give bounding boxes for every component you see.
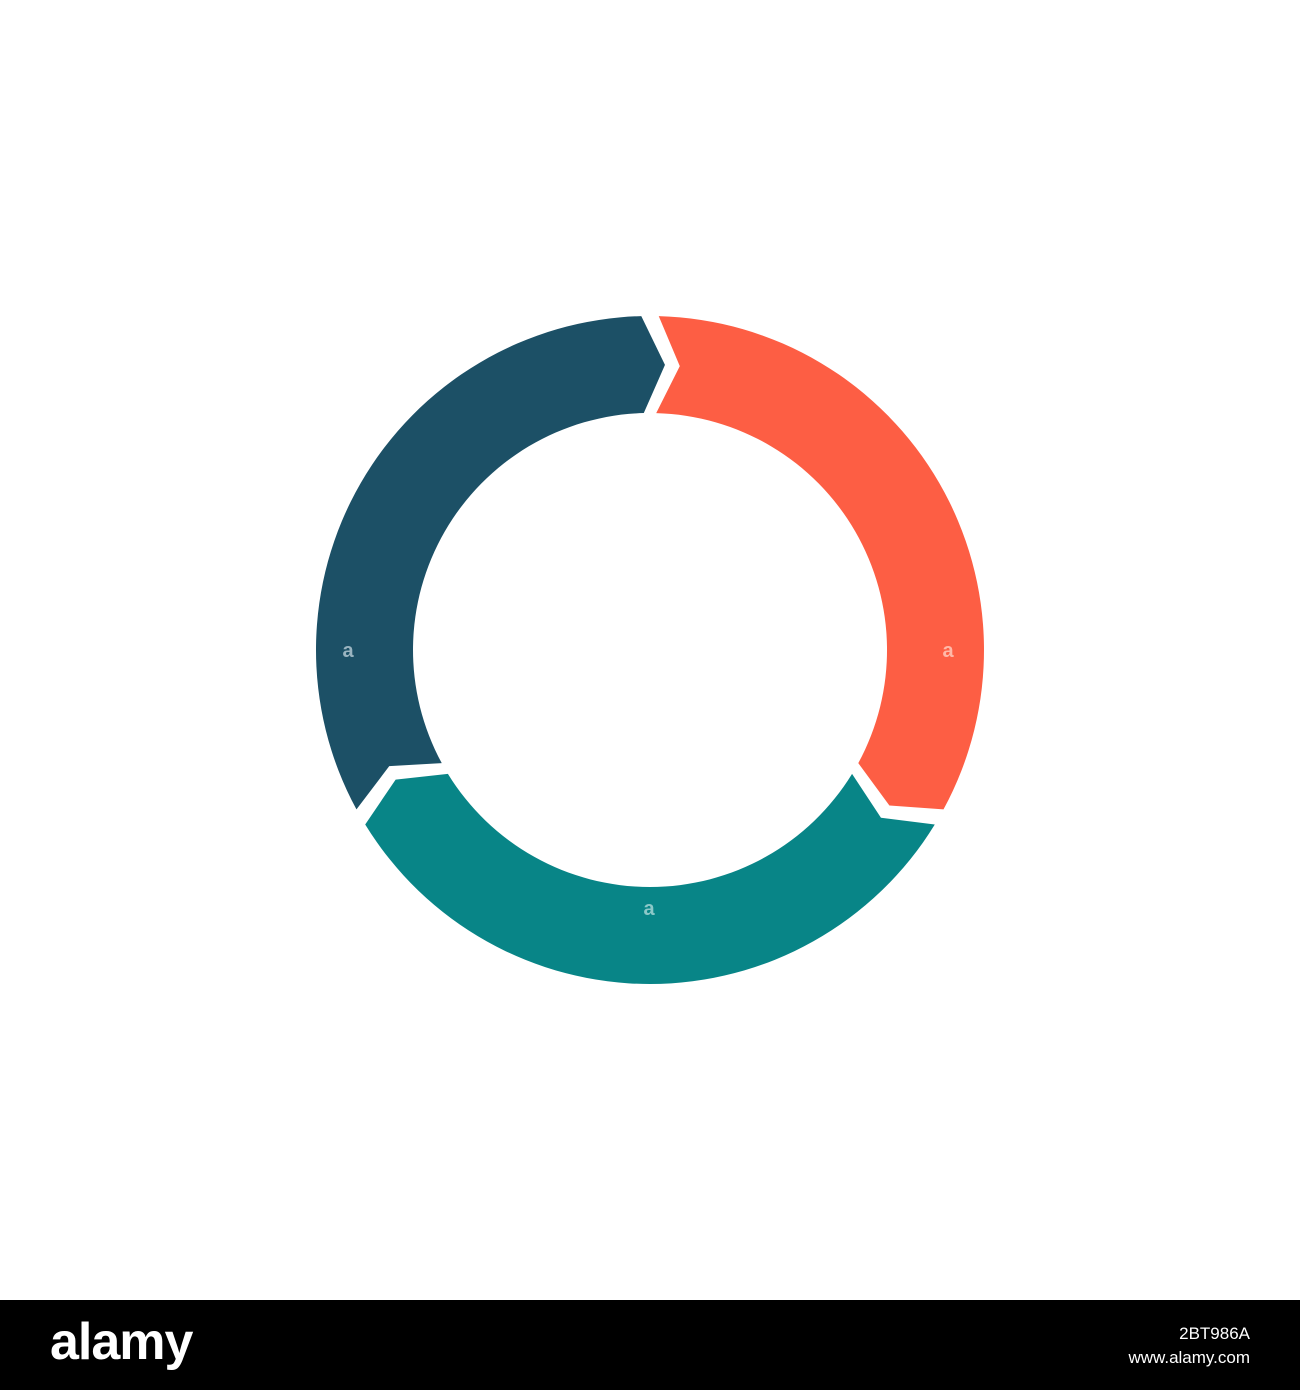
logo: alamy: [50, 1313, 192, 1371]
image id: www.alamy.com: [1128, 1348, 1250, 1367]
segment: orange arrow: a: [942, 640, 954, 662]
segment: teal arrow: a: [643, 898, 655, 920]
image id: [1128, 1324, 1250, 1367]
segment: navy arrow: a: [342, 640, 354, 662]
segment: navy arrow: [194, 281, 785, 812]
segment: teal arrow: [345, 576, 936, 1106]
footer bar: [0, 1300, 1300, 1390]
image id: 2BT986A: [1179, 1324, 1250, 1343]
segment: orange arrow: [656, 316, 984, 809]
